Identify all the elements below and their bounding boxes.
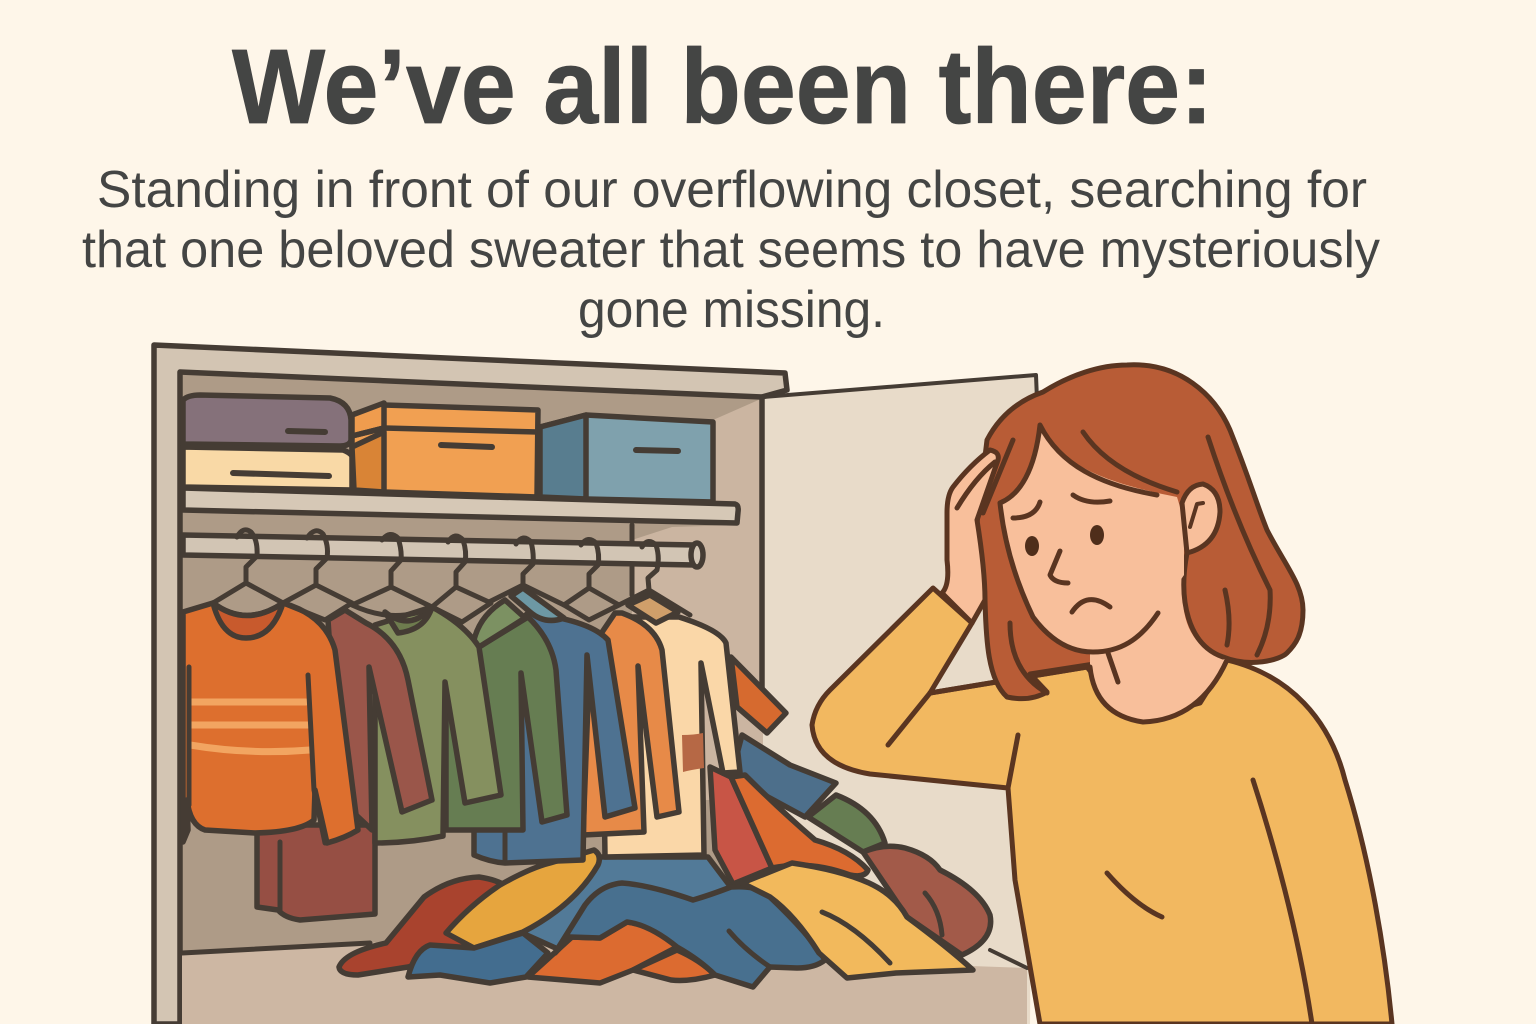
orange floor piece — [528, 922, 677, 983]
hair — [977, 365, 1303, 699]
intro text: Standing in front of our overflowing closet, searching for — [97, 161, 1367, 219]
orange striped sweater — [183, 603, 358, 843]
intro text: that one beloved sweater that seems to have mysteriously — [82, 221, 1380, 279]
orange box — [352, 405, 538, 497]
orange piece — [731, 775, 868, 876]
mustard piece — [446, 850, 599, 948]
ear — [1182, 484, 1220, 553]
intro text — [82, 161, 1380, 339]
sweater fold lines — [888, 667, 1312, 1024]
blue jacket — [474, 613, 635, 863]
hanging clothes — [183, 588, 740, 920]
hand on head — [942, 450, 998, 623]
sweater torso and arm — [812, 588, 1392, 1024]
front blue piece — [555, 883, 825, 987]
woman — [812, 365, 1392, 1024]
clothes pile — [339, 735, 991, 987]
neck — [1090, 530, 1227, 722]
sleeve behind clothes — [731, 657, 786, 733]
back blue piece — [731, 735, 836, 817]
olive jacket — [375, 607, 501, 843]
tan collar — [628, 595, 678, 623]
closet frame and interior — [154, 345, 1027, 1024]
folded purple blanket — [183, 395, 351, 446]
hair strands — [983, 437, 1270, 693]
left blue piece — [408, 933, 548, 983]
maroon shirt — [328, 610, 432, 830]
title: We’ve all been there: — [232, 28, 1213, 146]
orange cardigan — [583, 613, 679, 835]
cream shirt — [602, 617, 740, 857]
yellow piece — [742, 863, 973, 978]
facial features — [1013, 495, 1110, 612]
red-brown left piece — [339, 877, 512, 975]
face — [1000, 425, 1184, 682]
open closet door — [763, 375, 1037, 1024]
intro text: gone missing. — [578, 281, 885, 339]
hangers — [213, 530, 690, 622]
maroon trousers — [257, 825, 375, 920]
red piece — [710, 767, 772, 884]
hanging rod — [183, 535, 703, 567]
blue box — [540, 415, 713, 502]
shelf items: folded blankets and boxes — [183, 395, 713, 502]
central blue piece — [520, 857, 733, 950]
green jacket — [446, 617, 567, 830]
green piece — [808, 795, 885, 852]
maroon piece — [863, 846, 991, 955]
shelf — [183, 488, 738, 523]
folded cream blanket — [183, 447, 356, 490]
